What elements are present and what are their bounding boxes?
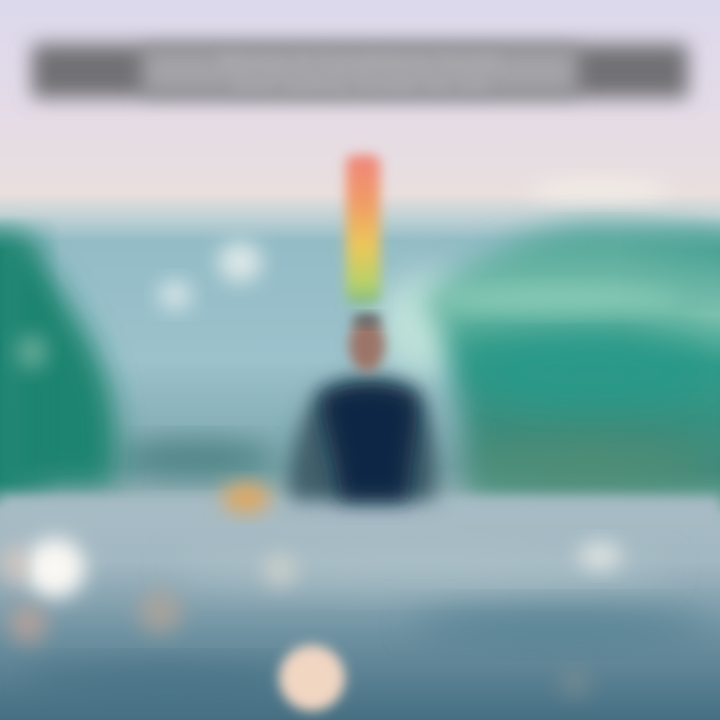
surfer hair xyxy=(352,314,382,326)
surfer arms xyxy=(290,379,436,500)
title text: Surf Safety Guide for All xyxy=(233,72,487,97)
title text: Waves & Conditions Guide xyxy=(220,48,500,73)
right green wave xyxy=(420,215,720,515)
title banner xyxy=(32,44,688,98)
surfer torso xyxy=(322,384,417,500)
wave backdrop xyxy=(115,178,670,476)
left dark green wave xyxy=(0,215,116,510)
title text xyxy=(220,48,500,97)
surfer xyxy=(290,314,436,500)
orange board highlight xyxy=(222,483,270,513)
colored gauge bar xyxy=(346,155,380,305)
foreground water xyxy=(0,496,720,696)
bokeh lights xyxy=(2,538,622,711)
title panel center xyxy=(142,46,578,96)
surfer head xyxy=(349,318,385,372)
